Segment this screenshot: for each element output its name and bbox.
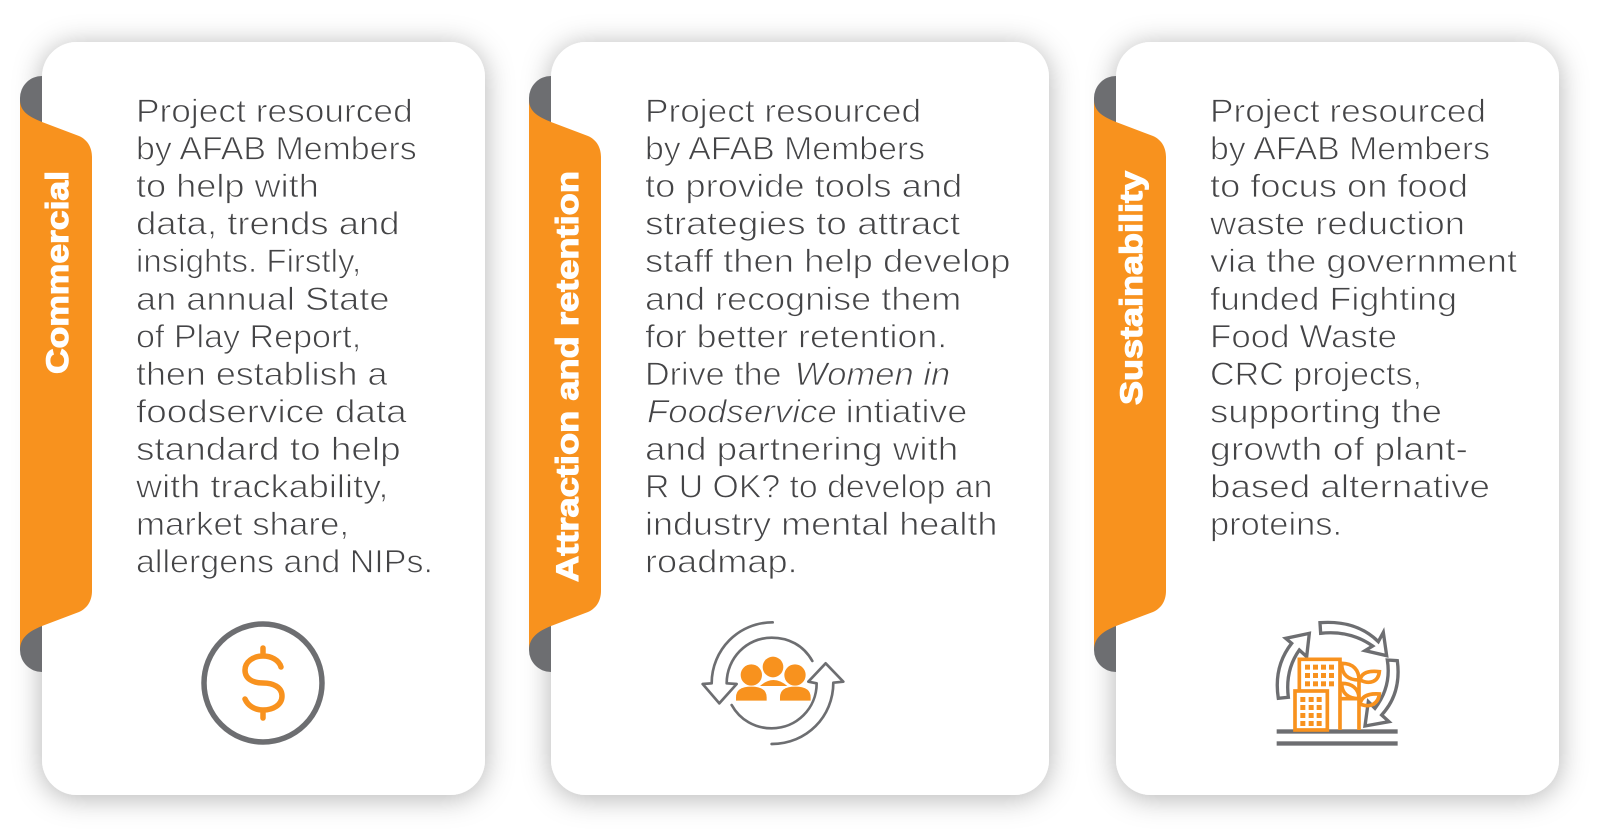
text block: commercial description <box>135 93 433 580</box>
text block: commercial description: foodservice data <box>136 394 407 429</box>
text block: commercial description: to help with <box>136 168 319 204</box>
text block: commercial description: Project resourced <box>136 93 413 129</box>
text block: sustainability description: waste reduction <box>1209 206 1465 242</box>
text block: attraction description: and recognise them <box>645 281 961 317</box>
ribbon: sustainability: Sustainability <box>1113 170 1149 405</box>
text block: sustainability description: based alternative <box>1210 468 1490 504</box>
text block: commercial description: by AFAB Members <box>136 131 417 167</box>
text block: sustainability description: by AFAB Members <box>1210 131 1490 167</box>
card background <box>551 42 1049 795</box>
text block: sustainability description: growth of plant- <box>1210 431 1468 467</box>
text block: commercial description: data, trends and <box>136 206 400 242</box>
text block: sustainability description <box>1209 93 1517 542</box>
text block: attraction description: R U OK? to develop an <box>645 469 992 504</box>
text block: attraction description: strategies to attract <box>645 206 960 242</box>
text block: sustainability description: CRC projects, <box>1210 356 1422 392</box>
text block: commercial description: of Play Report, <box>136 318 361 354</box>
text block: commercial description: an annual State <box>136 281 390 317</box>
panel: commercial <box>20 42 485 795</box>
text block: sustainability description: supporting the <box>1210 393 1442 429</box>
text block: sustainability description: Project resourced <box>1210 93 1486 129</box>
text block: attraction description: Women in <box>795 356 950 392</box>
text block: attraction description: roadmap. <box>645 544 798 580</box>
text block: attraction description: Project resourced <box>645 93 921 129</box>
ribbon: commercial: Commercial <box>39 171 75 374</box>
text block: sustainability description: funded Fighting <box>1210 281 1457 317</box>
text block: commercial description: then establish a <box>136 356 388 392</box>
text block: attraction description: staff then help develop <box>645 243 1010 279</box>
text block: commercial description: market share, <box>136 506 349 542</box>
text block: attraction description: industry mental health <box>645 506 997 542</box>
panel: attraction and retention <box>529 42 1049 795</box>
text block: sustainability description: via the government <box>1210 243 1517 279</box>
icon: dollar coin <box>204 624 322 742</box>
text block: commercial description: insights. Firstly, <box>136 243 361 279</box>
text block: attraction description <box>645 93 1010 580</box>
text block: sustainability description: proteins. <box>1210 506 1342 542</box>
text block: attraction description: to provide tools and <box>645 168 962 204</box>
text block: attraction description: Foodservice <box>647 393 837 429</box>
text block: commercial description: standard to help <box>136 431 401 467</box>
text block: commercial description: allergens and NIPs. <box>136 544 433 580</box>
card background <box>42 42 485 795</box>
icon: buildings and plant in cycle <box>1277 622 1398 746</box>
panel: sustainability <box>1094 42 1559 795</box>
ribbon: commercial <box>20 76 92 672</box>
text block: attraction description: and partnering with <box>645 431 958 467</box>
ribbon: attraction and retention <box>529 76 601 672</box>
text block: attraction description: Drive the <box>645 356 782 392</box>
icon: people in cycle <box>703 622 843 744</box>
text block: attraction description: intiative <box>846 393 967 429</box>
text block: sustainability description: to focus on food <box>1210 168 1468 204</box>
text block: commercial description: with trackability, <box>135 469 388 504</box>
card background <box>1116 42 1559 795</box>
ribbon: attraction and retention: Attraction and retention <box>549 171 585 582</box>
ribbon: sustainability <box>1094 76 1166 672</box>
text block: sustainability description: Food Waste <box>1210 318 1397 354</box>
text block: attraction description: for better retention. <box>645 318 947 354</box>
text block: attraction description: by AFAB Members <box>645 131 925 167</box>
